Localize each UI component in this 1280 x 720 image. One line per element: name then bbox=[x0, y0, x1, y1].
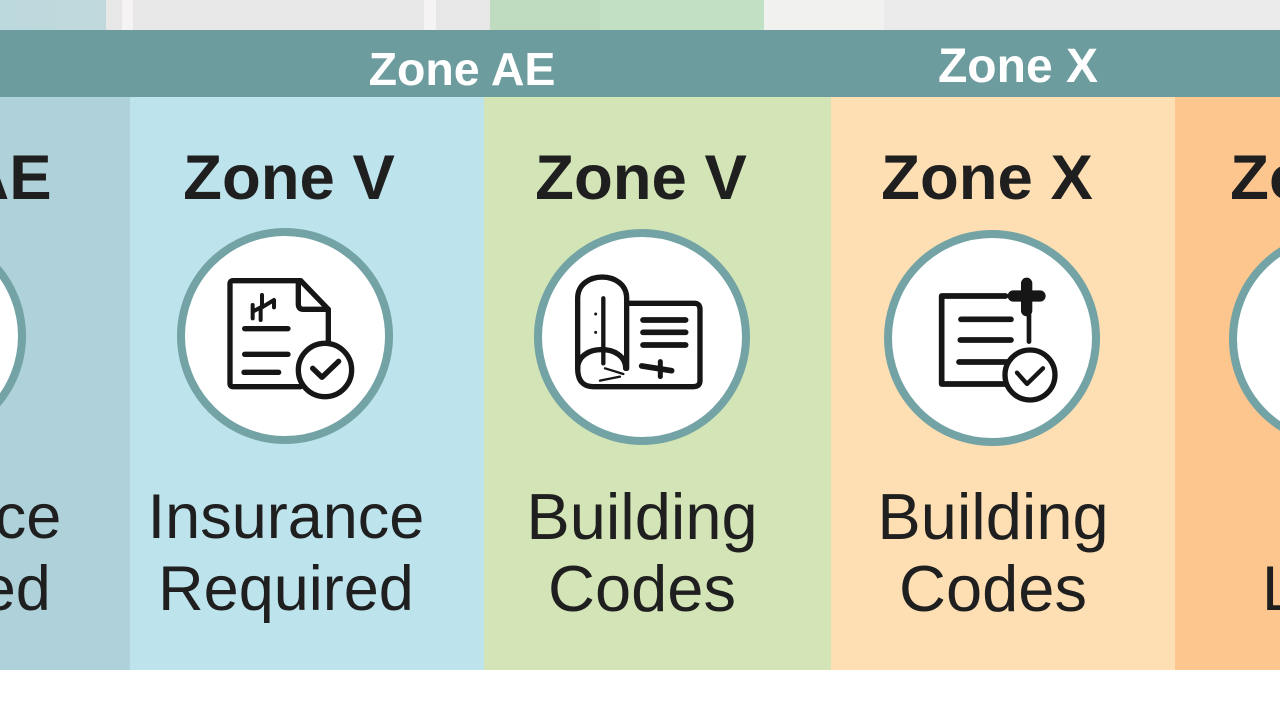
heading: Zone V: Zone V bbox=[535, 143, 747, 213]
panel: zone V building codes bbox=[484, 97, 831, 670]
icon circle: zone X (clipped) bbox=[1229, 231, 1280, 447]
band label: Zone AE: Zone AE bbox=[369, 43, 555, 95]
panel: zone V insurance bbox=[130, 97, 484, 670]
text: Insurance Required (clipped) bbox=[0, 482, 61, 624]
text: Building Codes: Building bbox=[526, 480, 758, 553]
text: Building Codes bbox=[877, 480, 1109, 625]
text: Building Codes: Codes bbox=[899, 552, 1087, 625]
icon circle: zone AE (clipped) bbox=[0, 228, 26, 444]
text: Building Codes bbox=[526, 480, 758, 625]
text: Building Codes: Codes bbox=[548, 552, 736, 625]
icon circle: building codes bbox=[534, 229, 750, 445]
panel: zone X (partial) bbox=[1175, 97, 1280, 670]
icon: checklist with marker bbox=[942, 283, 1055, 400]
icon: building plans roll bbox=[578, 277, 700, 387]
header band bbox=[0, 30, 1280, 97]
icon circle: building codes checklist bbox=[884, 230, 1100, 446]
panel: zone AE (partial) bbox=[0, 97, 130, 670]
icon: insurance document with check bbox=[230, 281, 352, 397]
text: Insurance Required bbox=[148, 482, 424, 624]
icon circle: insurance bbox=[177, 228, 393, 444]
band label: Zone X: Zone X bbox=[938, 40, 1098, 93]
background photo strip bbox=[0, 0, 1280, 30]
text: Insurance Required: Required bbox=[158, 554, 414, 624]
heading: Zone X: Zone X bbox=[881, 143, 1093, 213]
heading: Zone V: Zone V bbox=[183, 143, 395, 213]
panel: zone X building codes bbox=[831, 97, 1175, 670]
text: Building Codes: Building bbox=[877, 480, 1109, 553]
text: Insurance Required: Insurance bbox=[148, 482, 424, 552]
